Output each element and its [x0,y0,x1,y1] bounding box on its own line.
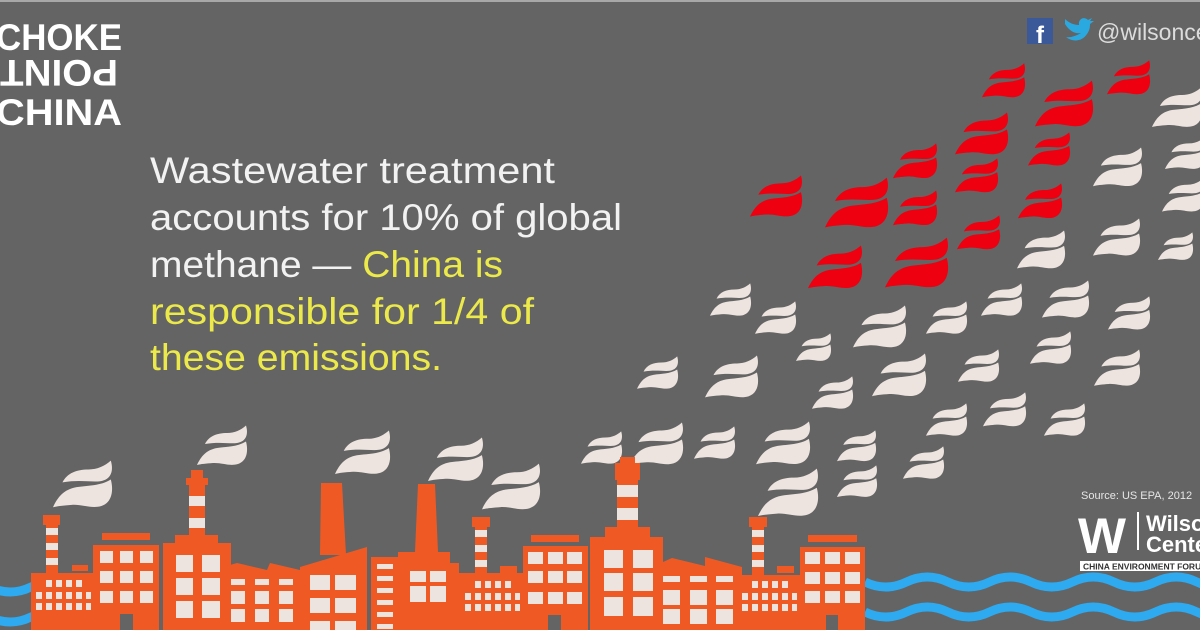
factory skyline [31,457,865,630]
headline text: these emissions. [150,337,442,378]
source note: Source: US EPA, 2012 [1081,490,1192,502]
water waves [0,577,1200,622]
icon: twitter [1065,18,1094,40]
Wilson Center logo [1078,508,1200,572]
Wilson Center logo: W [1078,508,1127,564]
red methane clouds [750,60,1150,288]
social handles [1027,18,1200,49]
logo: Choke Point China [0,17,122,133]
headline text: responsible for 1/4 of [150,291,535,332]
white smoke clouds [53,88,1200,516]
headline text: Wastewater treatment [150,150,556,191]
icon: facebook: f [1036,22,1045,49]
headline text: accounts for 10% of global [150,197,622,238]
icon: facebook [1027,18,1053,49]
logo: Choke Point China: CHOKE [0,17,122,58]
headline text: methane — China is [150,244,503,285]
logo: Choke Point China: POINT [0,52,118,93]
headline text [150,150,622,378]
